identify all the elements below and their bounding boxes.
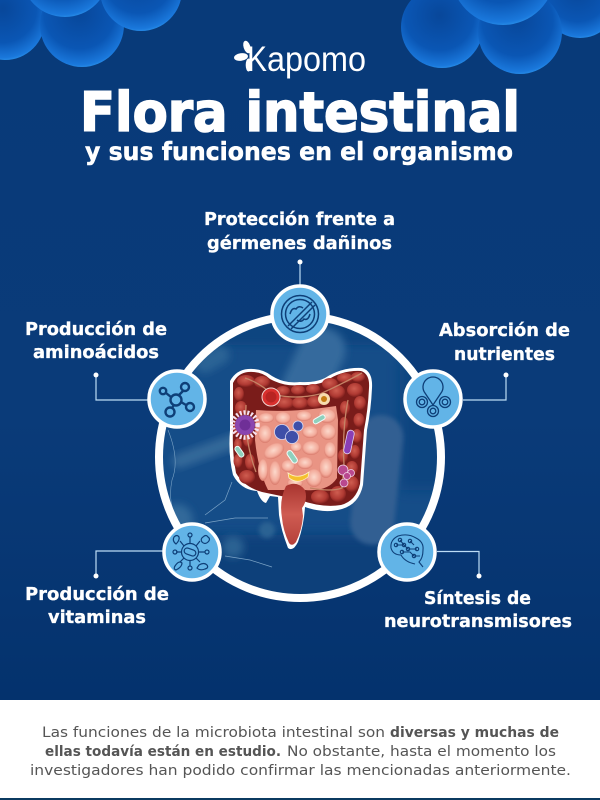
footer text: investigadores han podido confirmar las mencionadas anteriormente.	[30, 763, 571, 779]
central ring with photo background	[150, 310, 450, 615]
label: amino acids	[25, 319, 167, 363]
footer text: Las funciones de la microbiota intestinal son	[42, 725, 385, 741]
label: vitamins	[25, 584, 169, 628]
title: Flora intestinal	[80, 81, 520, 144]
label: nutrient absorption: Absorción de	[439, 320, 570, 341]
label: vitamins: vitaminas	[48, 607, 146, 628]
colon bands	[245, 373, 362, 490]
label: neurotransmitters	[384, 588, 572, 632]
small intestine folds	[258, 409, 336, 488]
label: protection: Protección frente a	[204, 209, 395, 230]
label: protection	[204, 209, 395, 254]
leader line and dot: right	[463, 372, 508, 400]
label: protection: gérmenes dañinos	[207, 233, 392, 254]
label: nutrient absorption: nutrientes	[454, 344, 555, 365]
logo wordmark: apomo	[267, 40, 366, 79]
label: neurotransmitters: neurotransmisores	[384, 611, 572, 632]
leader line and dot: top	[298, 260, 302, 285]
label: nutrient absorption	[439, 320, 570, 365]
colon haustra	[233, 372, 366, 504]
bacteria cluster: top right	[401, 0, 600, 74]
microbe: pink cluster	[338, 465, 354, 487]
microbe: blue cocci	[274, 421, 303, 444]
footer text: No obstante, hasta el momento los	[287, 744, 556, 760]
footer bottom strip	[0, 798, 600, 800]
logo	[234, 40, 366, 79]
icon: brain network	[379, 524, 435, 580]
icon: leaf	[234, 40, 252, 72]
microbe: green rods	[234, 414, 326, 464]
leader line and dot: bottom left	[94, 551, 163, 578]
intestine outline	[229, 368, 372, 549]
large intestine	[233, 371, 369, 506]
logo wordmark: K	[247, 40, 267, 79]
icon: germ protection	[272, 286, 328, 342]
intestine illustration	[229, 368, 372, 549]
subtitle: y sus funciones en el organismo	[85, 137, 513, 166]
rectum	[281, 484, 306, 545]
label: amino acids: Producción de	[25, 319, 167, 340]
leader line and dot: bottom right	[437, 552, 482, 578]
label: amino acids: aminoácidos	[33, 342, 159, 363]
footer text: diversas y muchas de	[390, 725, 559, 741]
microbe: yellow bacterium	[288, 472, 309, 481]
microbe: red cell	[262, 388, 280, 406]
footer text	[30, 725, 571, 779]
icon: amino acids molecule	[149, 371, 205, 427]
bacteria cluster: top left	[0, 0, 182, 67]
footer text: ellas todavía están en estudio.	[45, 744, 281, 760]
leader line and dot: left	[94, 372, 148, 400]
small intestine base	[255, 406, 338, 490]
microbe: violet rod	[343, 430, 355, 454]
label: neurotransmitters: Síntesis de	[424, 588, 531, 609]
icon: nutrient absorption	[405, 371, 461, 427]
label: vitamins: Producción de	[25, 584, 169, 605]
footer panel	[0, 700, 600, 798]
icon: vitamins	[164, 524, 220, 580]
microbe: orange virus	[318, 393, 330, 405]
microbe: purple virus	[232, 412, 258, 438]
